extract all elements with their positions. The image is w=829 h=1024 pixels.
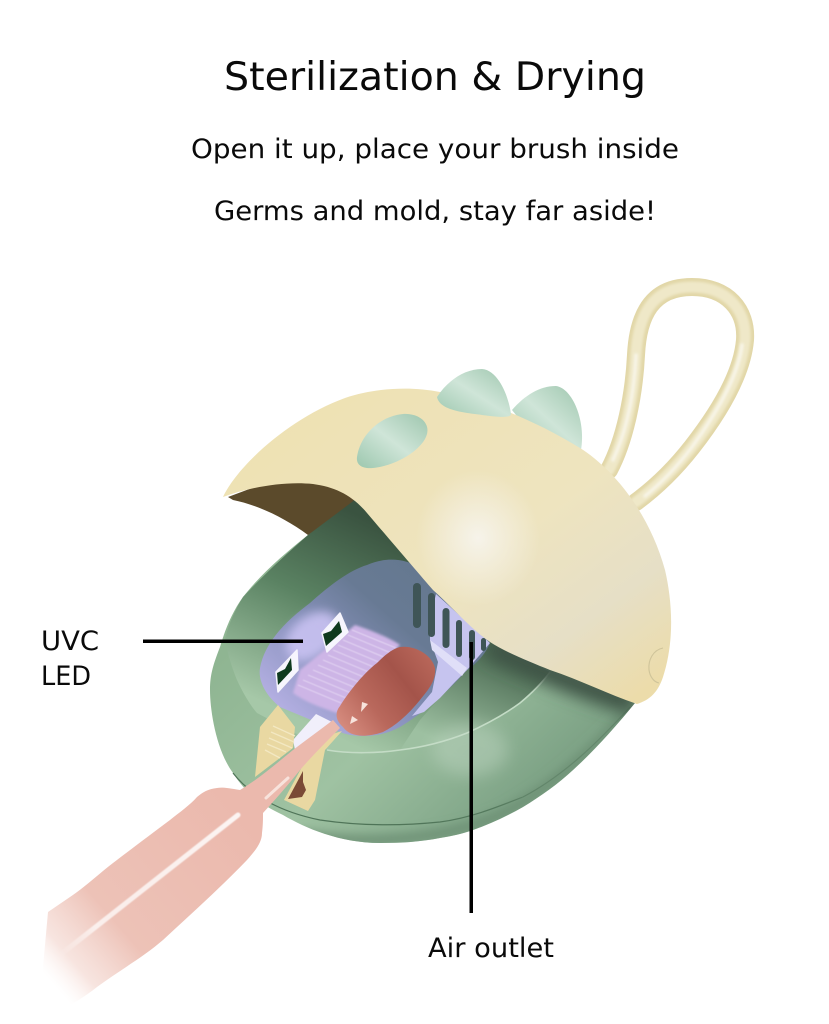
toothbrush bristles [293, 625, 400, 713]
inner rim right [400, 640, 550, 750]
insert teeth [288, 771, 306, 799]
head sparkle [350, 702, 368, 724]
icon: hanging loop strap [609, 287, 745, 502]
beige insert right [284, 731, 342, 811]
callout label: UVC LED [41, 626, 99, 692]
device illustration [40, 287, 745, 1013]
chamber glow [276, 601, 348, 671]
title: Sterilization & Drying [224, 55, 646, 100]
cap highlight [416, 470, 540, 606]
callout label: UVC LED: UVC [41, 626, 99, 657]
base glow [432, 724, 508, 776]
subtitle: line 1: Open it up, place your brush inside [191, 134, 679, 165]
neck highlight [266, 778, 288, 798]
beige cap [223, 369, 671, 704]
toothbrush head [337, 647, 435, 736]
white stem behind brush neck [293, 714, 332, 750]
toothbrush handle [40, 720, 340, 1013]
green base [210, 490, 635, 843]
icon: front spot [357, 414, 427, 468]
inner chamber [260, 560, 490, 736]
icon: rear spike [512, 386, 582, 450]
icon: UVC LED upper [322, 613, 348, 652]
icon: UVC LED lower [276, 650, 298, 692]
right wall panel [412, 594, 490, 716]
inner rim left [225, 490, 560, 752]
chamber floor shade [430, 640, 467, 676]
base lower shade [300, 703, 635, 840]
callout line: UVC LED [143, 640, 303, 643]
base seam [233, 707, 630, 825]
cap underside [228, 470, 365, 535]
callout line: air outlet [470, 642, 473, 913]
air vent slots [413, 583, 486, 660]
cap button [649, 648, 663, 683]
beige insert left [255, 705, 295, 777]
rim highlight line [327, 672, 550, 753]
handle highlight [60, 815, 238, 955]
callout label: air outlet: Air outlet [428, 933, 554, 964]
subtitle: line 2: Germs and mold, stay far aside! [214, 196, 656, 227]
callout label: UVC LED: LED [41, 661, 91, 692]
insert ridges [265, 726, 295, 758]
cap shadow on base [490, 645, 635, 703]
icon: middle spike [437, 369, 511, 417]
